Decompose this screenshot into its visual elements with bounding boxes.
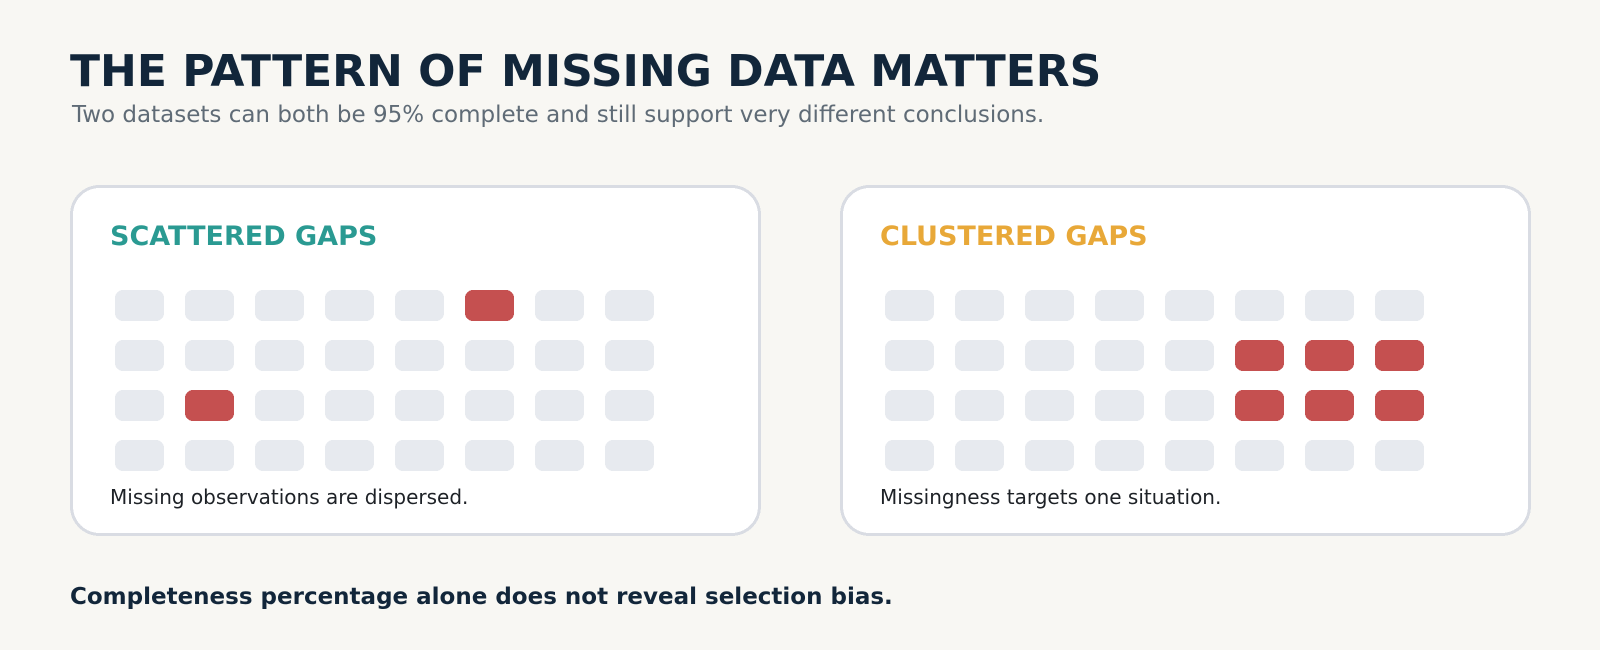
grid: scattered cells bbox=[115, 290, 654, 471]
takeaway: Completeness percentage alone does not reveal selection bias. bbox=[70, 584, 893, 610]
caption: scattered gaps: Missing observations are dispersed. bbox=[110, 485, 468, 509]
heading: clustered gaps: CLUSTERED GAPS bbox=[880, 221, 1148, 252]
panel: scattered gaps bbox=[70, 185, 761, 536]
title: THE PATTERN OF MISSING DATA MATTERS bbox=[70, 46, 1101, 97]
heading: scattered gaps: SCATTERED GAPS bbox=[110, 221, 377, 252]
caption: clustered gaps: Missingness targets one situation. bbox=[880, 485, 1221, 509]
grid: clustered cells bbox=[885, 290, 1424, 471]
panel: clustered gaps bbox=[840, 185, 1531, 536]
subtitle: Two datasets can both be 95% complete and still support very different conclusions. bbox=[71, 102, 1044, 128]
